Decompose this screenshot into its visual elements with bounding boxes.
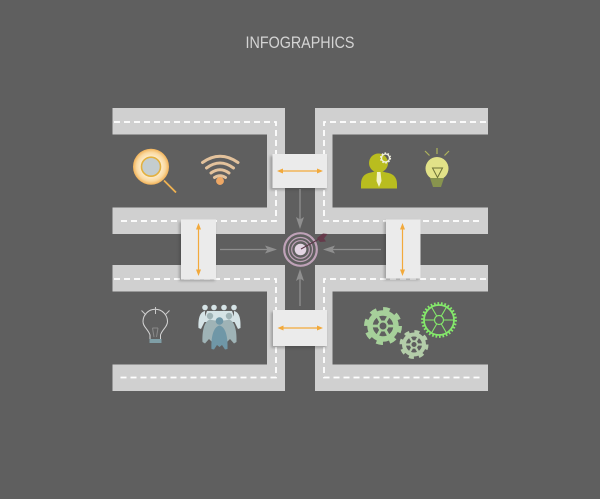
road: bottom left bbox=[112, 265, 285, 391]
icon: target bbox=[284, 233, 328, 266]
road: top right bbox=[315, 108, 488, 234]
arrow: from right to target bbox=[323, 246, 381, 254]
arrow: from top to target bbox=[296, 189, 304, 229]
icon: wifi bbox=[202, 156, 238, 184]
icon: gears bbox=[366, 303, 456, 358]
gear: small grey green bbox=[401, 332, 427, 358]
icon: group of people bbox=[198, 305, 241, 350]
road: bottom right bbox=[315, 265, 488, 391]
gear: bright green bbox=[422, 303, 456, 337]
icon: person with gear bbox=[361, 153, 397, 188]
bridge: top centre bbox=[270, 154, 327, 190]
bridge: left bbox=[179, 220, 216, 281]
gear: large pale green bbox=[366, 309, 400, 343]
arrow: from left to target bbox=[220, 246, 277, 254]
icon: magnifying glass bbox=[133, 149, 176, 192]
icon: light bulb, outline bbox=[142, 307, 170, 343]
arrow: from bottom to target bbox=[296, 269, 304, 306]
bridge: bottom centre bbox=[271, 310, 327, 348]
icon: light bulb, lit bbox=[425, 148, 449, 187]
title: INFOGRAPHICS bbox=[246, 34, 354, 52]
bridge: right bbox=[384, 220, 420, 280]
road: top left bbox=[112, 108, 285, 234]
